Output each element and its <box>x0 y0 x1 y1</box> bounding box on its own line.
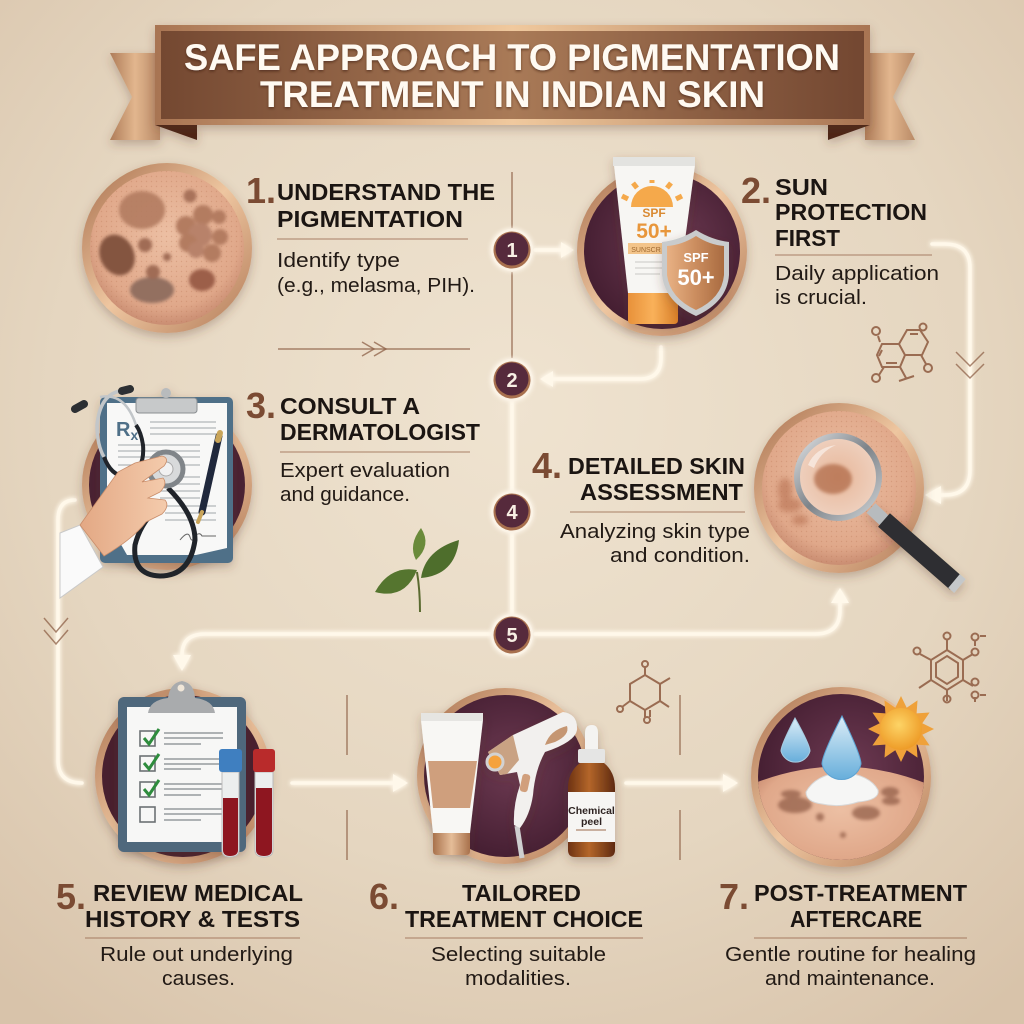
step 5 text <box>56 876 303 990</box>
skin surface with patches <box>758 767 924 860</box>
hand <box>80 456 167 556</box>
stethoscope <box>75 389 195 576</box>
icon: sunscreen tube and SPF shield <box>577 157 747 336</box>
sunscreen tube <box>613 157 695 324</box>
step 7 text: AFTERCARE <box>790 906 922 932</box>
step 7 text: POST-TREATMENT <box>754 880 967 906</box>
SPF shield: 50+ <box>677 265 715 290</box>
sunscreen tube: SPF <box>642 206 666 220</box>
step 6 text: Selecting suitable <box>431 944 606 966</box>
sunscreen tube: SUNSCR <box>631 247 661 254</box>
node 4: 4 <box>506 502 518 524</box>
prescription clipboard <box>100 388 233 563</box>
step 5 text: 5. <box>56 876 86 917</box>
step 7 text: and maintenance. <box>765 968 935 990</box>
step 4 text <box>532 445 750 567</box>
icon: skin with pigmentation patches <box>82 163 252 333</box>
banner plate <box>155 25 870 125</box>
icon: review checklist and blood tubes <box>95 681 275 864</box>
step 6 text: 6. <box>369 876 399 917</box>
numbered nodes <box>491 229 533 656</box>
magnifier handle <box>871 508 960 586</box>
icon: molecule bottom centre <box>617 661 670 723</box>
red blood tube <box>253 749 275 857</box>
step 4 text: and condition. <box>610 545 750 567</box>
step 3 text: and guidance. <box>280 484 410 506</box>
title text: TREATMENT IN INDIAN SKIN <box>260 74 765 115</box>
step 5 text: causes. <box>162 968 235 990</box>
icon: aftercare drops, cream and sun <box>751 687 934 870</box>
step 4 text: 4. <box>532 445 562 486</box>
step 1 text: Identify type <box>277 250 400 272</box>
icon: clipboard, stethoscope and hand <box>60 388 252 598</box>
step 3 text: DERMATOLOGIST <box>280 419 480 445</box>
cream tube <box>421 713 483 855</box>
sun <box>868 696 934 762</box>
large water drop <box>822 716 861 780</box>
step 5 text: Rule out underlying <box>100 944 293 966</box>
step 4 text: DETAILED SKIN <box>568 453 745 479</box>
step 4 text: ASSESSMENT <box>580 479 743 505</box>
step 3 text <box>246 385 480 506</box>
step 1 text: 1. <box>246 170 276 211</box>
sleeve <box>60 525 103 598</box>
step 6 text: TREATMENT CHOICE <box>405 906 643 932</box>
node 4 <box>491 491 533 533</box>
blue blood tube <box>219 749 242 857</box>
node 5: 5 <box>506 625 518 647</box>
step 7 text <box>719 876 976 990</box>
chemical peel bottle: peel <box>581 816 602 828</box>
pen <box>198 433 220 522</box>
icon: treatment products <box>417 688 615 864</box>
prescription clipboard: R <box>116 419 130 441</box>
checklist clipboard <box>118 681 246 852</box>
SPF shield <box>662 230 729 316</box>
icon: green leaves <box>375 528 459 612</box>
prescription clipboard: x <box>130 427 138 443</box>
magnifier lens <box>797 436 879 518</box>
title banner <box>110 25 915 140</box>
step 6 text: TAILORED <box>462 880 581 906</box>
sunscreen tube: 50+ <box>636 220 672 243</box>
step 5 text: REVIEW MEDICAL <box>93 880 303 906</box>
chemical peel bottle <box>568 725 615 857</box>
node 5 <box>491 614 533 656</box>
icon: magnifying glass over skin <box>754 403 960 586</box>
cream dollop <box>806 772 878 806</box>
flow connectors <box>44 172 984 860</box>
step 1 text: (e.g., melasma, PIH). <box>277 275 475 297</box>
step 3 text: 3. <box>246 385 276 426</box>
laser device <box>487 712 577 858</box>
step 2 text: is crucial. <box>775 287 867 309</box>
step 6 text: modalities. <box>465 968 571 990</box>
node 1: 1 <box>506 240 518 262</box>
node 1 <box>491 229 533 271</box>
step 2 text: FIRST <box>775 225 840 251</box>
step 6 text <box>369 876 643 990</box>
step 7 text: Gentle routine for healing <box>725 944 976 966</box>
step 5 text: HISTORY & TESTS <box>85 906 300 932</box>
icon: molecule top right <box>872 324 932 382</box>
step 2 text: PROTECTION <box>775 199 927 225</box>
step 4 text: Analyzing skin type <box>560 521 750 543</box>
step 3 text: CONSULT A <box>280 393 420 419</box>
node 2: 2 <box>506 370 518 392</box>
node 2 <box>491 359 533 401</box>
small water drop <box>781 718 810 762</box>
step 7 text: 7. <box>719 876 749 917</box>
SPF shield: SPF <box>683 250 709 265</box>
step 2 text: Daily application <box>775 263 939 285</box>
step 1 text <box>246 170 495 297</box>
step 2 text: SUN <box>775 174 828 200</box>
title text: SAFE APPROACH TO PIGMENTATION <box>184 37 840 78</box>
step 1 text: UNDERSTAND THE <box>277 179 495 205</box>
step 3 text: Expert evaluation <box>280 460 450 482</box>
step 2 text <box>741 170 939 309</box>
step 2 text: 2. <box>741 170 771 211</box>
step 1 text: PIGMENTATION <box>277 206 463 232</box>
banner ribbon tails <box>110 53 915 140</box>
icon: molecule top right of aftercare <box>914 632 986 702</box>
chemical peel bottle: Chemical <box>568 805 615 817</box>
